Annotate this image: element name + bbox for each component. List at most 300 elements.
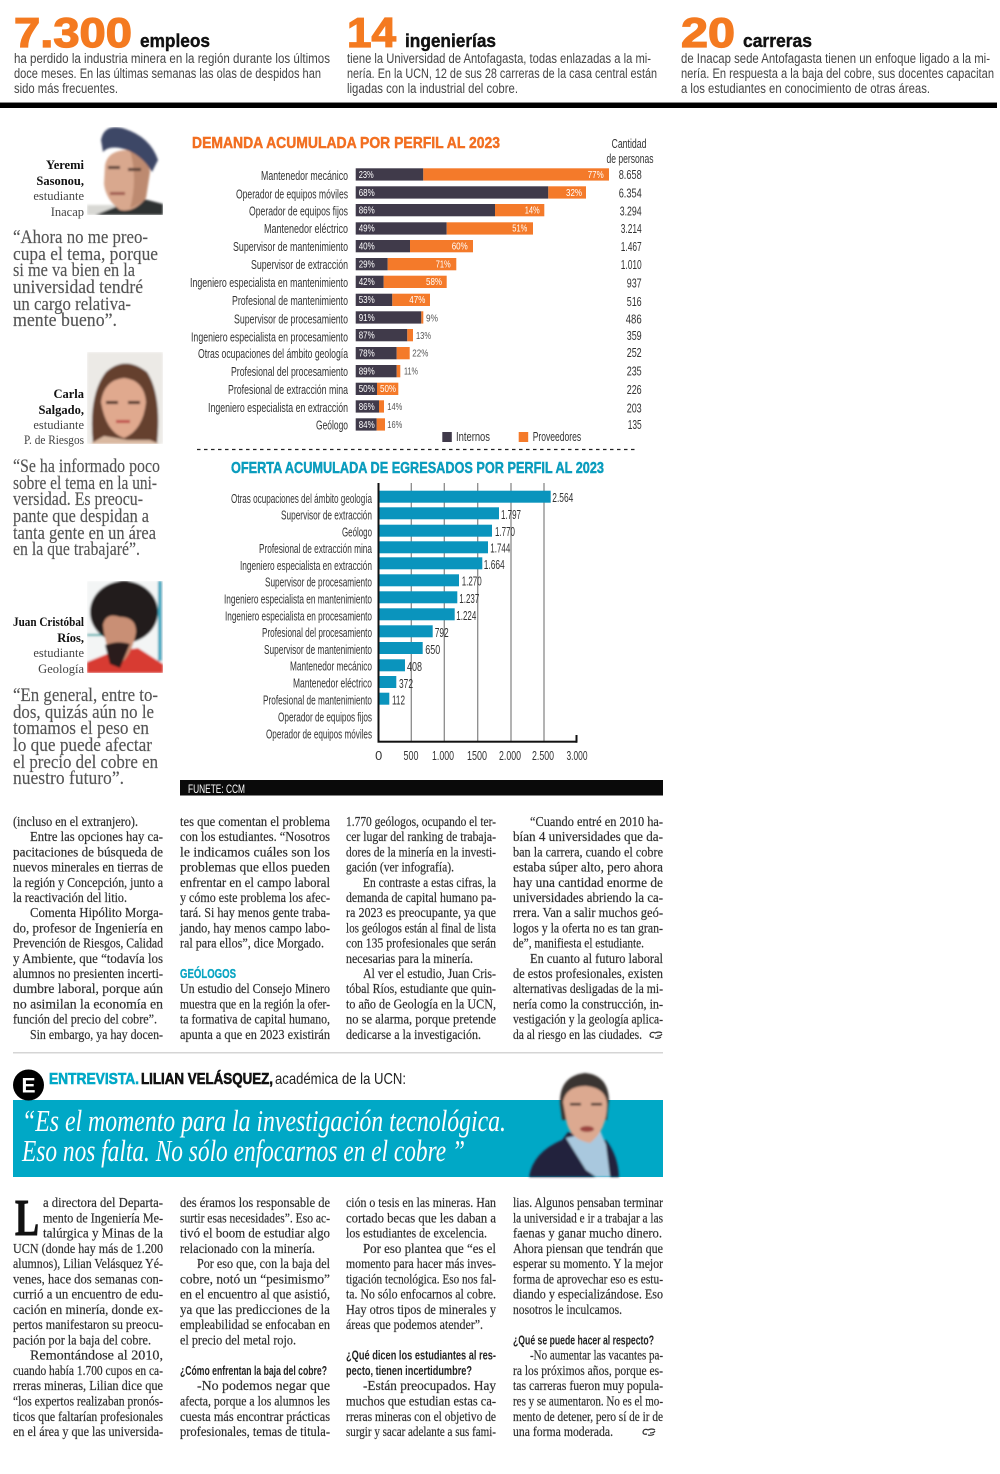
interview column 2: cobre, notó un “pesimismo”: [180, 1271, 330, 1286]
caption: Juan: Geología: [38, 662, 84, 676]
article column 4: [513, 814, 663, 1042]
interview heading: ENTREVISTA.: [49, 1071, 139, 1088]
row labels: Operador de equipos móviles: [266, 726, 372, 742]
quote: Yeremi: “Ahora no me preo-: [13, 227, 148, 248]
profile: Carla Salgado: [13, 352, 163, 560]
article column 2: con los estudiantes. “Nosotros: [180, 829, 330, 844]
legend: Internos: [456, 429, 490, 444]
interview column 4: res y se aumentaron. No es el mo-: [513, 1394, 663, 1408]
quote: Juan: dos, quizás aún no le: [13, 702, 154, 723]
axis tick labels: 500: [404, 748, 418, 763]
interview heading: académica de la UCN:: [275, 1071, 406, 1088]
article column 2: enfrentar en el campo laboral: [180, 875, 330, 890]
percentage labels: 13%: [416, 330, 431, 342]
row labels: Profesional del procesamiento: [231, 364, 348, 379]
article column 1: Sin embargo, ya hay docen-: [30, 1027, 163, 1042]
row labels: Ingeniero especialista en extracción: [240, 558, 372, 573]
article column 1: función del precio del cobre”.: [13, 1012, 157, 1027]
interview column 4: -No aumentar las vacantes pa-: [530, 1348, 663, 1363]
article column 1: Entre las opciones hay ca-: [30, 829, 163, 844]
article column 4: En cuanto al futuro laboral: [530, 951, 663, 966]
row labels: Operador de equipos fijos: [278, 710, 372, 724]
stat: 14 ingenierías: tiene la Universidad de Antofagasta, todas enlazadas a la mi-: [347, 51, 651, 66]
article column 1: pacitaciones de búsqueda de: [13, 844, 163, 859]
value labels: 1.664: [484, 557, 505, 572]
article column 1: y Ambiente, que “todavía los: [13, 951, 163, 966]
source bar: FUNETE: CCM: [188, 784, 245, 796]
interview column 1: “los expertos realizaban pronós-: [13, 1394, 163, 1408]
caption: Juan: estudiante: [33, 646, 84, 660]
percentage labels: 87%: [359, 330, 375, 342]
article column 2: muestra que en la región la ofer-: [180, 996, 330, 1011]
totals column: [619, 167, 642, 432]
article column 3: ra 2023 es preocupante, ya que: [346, 905, 496, 920]
article column 4: bían 4 universidades que da-: [513, 829, 663, 844]
icon: end mark: [643, 1429, 655, 1435]
percentage labels: 77%: [588, 169, 604, 181]
interview column 3: Por eso plantea que “es el: [363, 1241, 496, 1256]
interview column 2: profesionales, temas de titula-: [180, 1424, 330, 1439]
interview column 2: cuesta más encontrar prácticas: [180, 1409, 330, 1424]
interview column 1: en el área y que las universida-: [13, 1424, 163, 1439]
interview column 4: esperar su momento. Y la mejor: [513, 1256, 663, 1271]
row labels: Ingeniero especialista en mantenimiento: [224, 592, 372, 606]
interview column 2: tivó el boom de estudiar algo: [180, 1226, 330, 1240]
article column 2: apunta a que en 2023 existirán: [180, 1027, 330, 1042]
interview pull quote: Eso nos falta. No sólo enfocarnos en el cobre ”: [21, 1133, 465, 1168]
profile: Juan Cristóbal Ríos: [13, 581, 163, 789]
article column 1: la región y Concepción, junto a: [13, 875, 163, 890]
interview column 3: ción o tesis en las mineras. Han: [346, 1195, 496, 1210]
totals column: 1.010: [621, 257, 642, 272]
article column 3: dedicarse a la investigación.: [346, 1027, 481, 1042]
chart: demanda acumulada por perfil: [190, 135, 654, 444]
article column 1: Comenta Hipólito Morga-: [30, 905, 163, 920]
stat: 14 ingenierías: ligadas con la industrial del cobre.: [347, 81, 518, 96]
stacked bars: [356, 168, 609, 431]
stat: 7.300 empleos: ha perdido la industria minera en la región durante los últimos: [14, 51, 330, 66]
caption: Yeremi: estudiante: [33, 189, 84, 203]
stat: 20 carreras: carreras: [743, 31, 812, 51]
quote: Yeremi: mente bueno”.: [13, 310, 117, 331]
quote: Yeremi: [13, 227, 158, 331]
chart title: demanda: DEMANDA ACUMULADA POR PERFIL AL 2023: [192, 135, 500, 152]
article column 2: Un estudio del Consejo Minero: [180, 981, 330, 996]
quote: Carla: tanta gente en un área: [13, 523, 156, 544]
interview column 4: faenas y ganar mucho dinero.: [513, 1226, 662, 1240]
article column 1: [13, 814, 163, 1042]
stat: 14 ingenierías: 14: [347, 9, 397, 56]
quote: Juan: “En general, entre to-: [13, 685, 158, 706]
article column 4: da al riesgo en las ciudades.: [513, 1027, 642, 1042]
interview column 1: currió a un encuentro de edu-: [13, 1287, 163, 1302]
interview question 3: ¿Qué se puede hacer al respecto?: [513, 1332, 654, 1347]
interview column 4: Ahora piensan que tendrán que: [513, 1241, 663, 1256]
interview column 4: una forma moderada.: [513, 1424, 613, 1439]
quote: Yeremi: cupa el tema, porque: [13, 244, 158, 265]
interview column 4: mento de detener, pero sí de ir de: [513, 1409, 663, 1424]
interview column 4: tas carreras fueron muy popula-: [513, 1378, 663, 1393]
totals column: 3.214: [621, 221, 642, 236]
row labels: Supervisor de mantenimiento: [264, 642, 372, 657]
percentage labels: 23%: [359, 169, 374, 181]
totals column: 235: [627, 364, 642, 378]
legend: Proveedores: [533, 429, 581, 444]
quote: Carla: pante que despidan a: [13, 506, 149, 527]
interview teal band: [13, 1100, 663, 1177]
quote: Juan: nuestro futuro”.: [13, 768, 124, 789]
percentage labels: 84%: [359, 419, 375, 431]
article column 4: hay una cantidad enorme de: [513, 875, 663, 890]
interview column 2: afecta, porque a los alumnos les: [180, 1394, 330, 1408]
row labels: Operador de equipos móviles: [236, 186, 348, 202]
interview column 1: alumnos), Lilian Velásquez Yé-: [13, 1256, 163, 1272]
totals column: 1.467: [621, 239, 642, 254]
quote: Juan: el precio del cobre en: [13, 752, 158, 773]
chart: oferta acumulada de egresados: [224, 460, 604, 763]
axes: [378, 483, 578, 743]
percentage labels: 32%: [566, 187, 582, 199]
interview heading: LILIAN VELÁSQUEZ,: [141, 1069, 273, 1088]
quote: Carla: “Se ha informado poco: [13, 456, 160, 477]
row labels: Geólogo: [342, 524, 372, 540]
interview column 1: rreras mineras, Lilian dice que: [13, 1378, 163, 1393]
axis tick labels: [375, 748, 588, 763]
interview column 2: relacionado con la minería.: [180, 1241, 315, 1256]
row labels: Otras ocupaciones del ámbito geología: [231, 491, 373, 506]
percentage labels: 16%: [387, 419, 402, 431]
interview column 3: los estudiantes de excelencia.: [346, 1226, 487, 1240]
article column 1: no asimilan la economía en: [13, 996, 163, 1011]
interview column 1: a directora del Departa-: [43, 1195, 163, 1210]
article column 2: problemas que ellos pueden: [180, 860, 330, 875]
quote: Carla: versidad. Es preocu-: [13, 489, 143, 510]
row labels: [190, 168, 349, 432]
chart title: oferta: OFERTA ACUMULADA DE EGRESADOS POR PERFIL AL 2023: [231, 460, 604, 477]
percentage labels: 86%: [359, 204, 375, 216]
axis tick labels: 1.000: [432, 748, 454, 763]
row labels: Profesional del procesamiento: [262, 625, 372, 640]
article column 3: demanda de capital humano pa-: [346, 890, 496, 905]
article column 1: la reactivación del litio.: [13, 890, 127, 905]
article column 3: los geólogos están al final de lista: [346, 920, 496, 935]
totals column: 6.354: [619, 186, 642, 200]
article column 3: tóbal Ríos, estudiante que quin-: [346, 981, 496, 996]
percentage labels: 58%: [426, 276, 442, 288]
value labels: 112: [392, 692, 405, 708]
percentage labels: 29%: [359, 258, 375, 270]
article column 4: de”, manifiesta el estudiante.: [513, 936, 644, 951]
article column 4: alternativas desligadas de la mi-: [513, 981, 663, 996]
interview column 1: cuando había 1.700 cupos en ca-: [13, 1363, 163, 1378]
article column 3: to año de Geología en la UCN,: [346, 996, 496, 1011]
percentage labels: 42%: [359, 276, 375, 288]
caption: Juan: [13, 615, 84, 676]
value labels: 1.770: [495, 524, 515, 539]
interview column 3: tigación tecnológica. Eso nos fal-: [346, 1271, 496, 1286]
article column 4: nería como la construcción, in-: [513, 996, 663, 1011]
interview column 1: UCN (donde hay más de 1.200: [13, 1241, 163, 1257]
percentage labels: 50%: [380, 383, 396, 395]
article column 2: [179, 814, 330, 1042]
percentage labels: 91%: [359, 312, 375, 324]
row labels: Ingeniero especialista en extracción: [208, 400, 348, 415]
row labels: Profesional de mantenimiento: [263, 692, 372, 708]
row labels: Geólogo: [316, 418, 348, 432]
row labels: [224, 491, 373, 742]
article column 3: [346, 814, 496, 1042]
article column 3: gación (ver infografía).: [346, 860, 454, 876]
value labels: 1.224: [456, 608, 476, 623]
totals column: 486: [626, 312, 642, 326]
interview column 3: ta. No sólo enfocarnos al cobre.: [346, 1287, 496, 1302]
row labels: Profesional de extracción mina: [228, 382, 349, 397]
interview question 2: ¿Qué dicen los estudiantes al res-: [346, 1348, 496, 1363]
article column 2: jando, hay menos campo labo-: [179, 920, 330, 935]
interview column 4: forma de aprovechar eso es estu-: [513, 1271, 663, 1286]
interview question 1: ¿Cómo enfrentan la baja del cobre?: [180, 1363, 327, 1378]
caption: Carla: Carla: [53, 387, 85, 401]
interview column 3: surgir y sacar adelante a sus fami-: [346, 1424, 496, 1439]
row labels: Mantenedor mecánico: [290, 658, 372, 674]
article column 1: Prevención de Riesgos, Calidad: [13, 936, 163, 951]
article column 2: ral para ellos”, dice Morgado.: [180, 936, 324, 951]
percentage labels: 14%: [525, 204, 540, 216]
interview column 4: [513, 1195, 663, 1439]
interview column 2: Por eso que, con la baja del: [197, 1256, 330, 1271]
caption: Yeremi: Sasonou,: [36, 174, 84, 188]
interview column 1: mento de Ingeniería Me-: [43, 1210, 163, 1225]
quote: Yeremi: un cargo relativa-: [13, 294, 131, 315]
percentage labels: 50%: [359, 383, 375, 395]
interview column 1: Remontándose al 2010,: [30, 1348, 163, 1363]
interview column 1: venes, hace dos semanas con-: [13, 1271, 163, 1286]
column header: cantidad de personas: [606, 136, 654, 166]
stat: 20 carreras: a los estudiantes en conocimiento de otras áreas.: [681, 81, 930, 96]
axis tick labels: 2.000: [499, 748, 521, 763]
row labels: Otras ocupaciones del ámbito geología: [198, 346, 349, 361]
stat: 7.300 empleos: empleos: [140, 31, 210, 51]
article column 1: alumnos no presienten incerti-: [13, 966, 163, 981]
article column 2: y cómo este problema los afec-: [180, 890, 330, 905]
row labels: Operador de equipos fijos: [249, 204, 348, 218]
percentage labels: 68%: [359, 187, 375, 199]
interview pull quote: [21, 1103, 506, 1168]
article column 3: necesarias para la minería.: [346, 951, 473, 966]
interview column 3: áreas que podemos atender”.: [346, 1317, 483, 1332]
quote: Yeremi: si me va bien en la: [13, 260, 135, 281]
percentage labels: 22%: [412, 348, 428, 360]
totals column: 252: [627, 345, 642, 360]
article column 4: “Cuando entré en 2010 ha-: [530, 814, 663, 829]
caption: Yeremi: Inacap: [51, 205, 84, 219]
axis tick labels: 2.500: [532, 748, 554, 763]
article column 1: do, profesor de Ingeniería en: [13, 920, 163, 935]
interview column 4: ra los próximos años, porque es-: [513, 1363, 663, 1378]
article column 4: vestigación y la geología aplica-: [513, 1012, 663, 1027]
stat: 14 ingenierías: nería. En la UCN, 12 de sus 28 carreras de la casa central están: [347, 66, 657, 81]
interview column 2: des éramos los responsable de: [180, 1195, 330, 1210]
article column 3: 1.770 geólogos, ocupando el ter-: [346, 814, 496, 829]
article column 4: rrera. Van a salir muchos geó-: [513, 905, 663, 920]
source bar: [180, 780, 663, 796]
quote: Carla: sobre el tema en la uni-: [13, 473, 157, 494]
grid lines: [411, 483, 544, 741]
row labels: Mantenedor eléctrico: [264, 221, 348, 236]
article column 2: le indicamos cuáles son los: [180, 844, 330, 859]
row labels: Mantenedor mecánico: [261, 168, 348, 183]
interview column 1: talúrgica y Minas de la: [43, 1226, 163, 1240]
interview heading: [49, 1069, 406, 1088]
totals column: 937: [627, 276, 642, 290]
interview column 1: pertos manifestaron su preocu-: [13, 1317, 163, 1332]
photo: Carla: [87, 352, 163, 444]
totals column: 135: [628, 417, 642, 432]
article column 4: logos y la oferta no es tan gran-: [513, 920, 663, 935]
article column 1: (incluso en el extranjero).: [13, 814, 138, 830]
interview column 2: en el encuentro al que asistió,: [180, 1287, 330, 1302]
interview column 2: el precio del metal rojo.: [180, 1332, 296, 1347]
article column 4: ban la carrera, cuando el cobre: [513, 844, 663, 859]
row labels: Profesional de extracción mina: [259, 541, 373, 556]
value labels: 1.270: [462, 574, 482, 588]
totals column: 516: [627, 294, 642, 309]
article column 2: ta formativa de capital humano,: [180, 1012, 330, 1027]
value labels: 1.237: [459, 591, 479, 606]
article column 2: tará. Si hay menos gente traba-: [180, 905, 330, 920]
percentage labels: 9%: [426, 312, 438, 324]
value labels: 408: [407, 659, 422, 674]
caption: Yeremi: [33, 158, 85, 219]
article column 3: En contraste a estas cifras, la: [363, 875, 496, 890]
interview column 3: rreras mineras con el objetivo de: [346, 1409, 496, 1424]
percentage labels: 53%: [359, 294, 375, 306]
totals column: 203: [627, 400, 642, 416]
interview column 2: ya que las predicciones de la: [180, 1302, 330, 1317]
totals column: 3.294: [620, 204, 642, 218]
value labels: 650: [425, 642, 440, 657]
article column 2: tes que comentan el problema: [180, 814, 330, 829]
quote: Juan: [13, 685, 158, 789]
axis tick labels: 1500: [467, 748, 487, 763]
stat: 7.300 empleos: sido más frecuentes.: [14, 81, 118, 96]
bars: [379, 491, 551, 705]
row labels: Supervisor de extracción: [281, 508, 372, 522]
quote: Carla: [13, 456, 160, 560]
interview column 3: cortado becas que les daban a: [346, 1210, 496, 1225]
stat: 14 ingenierías: ingenierías: [405, 31, 496, 51]
interview column 3: Hay otros tipos de minerales y: [346, 1302, 496, 1317]
legend: [442, 429, 581, 444]
quote: Carla: en la que trabajaré”.: [13, 539, 140, 560]
column header: cantidad de personas: Cantidad: [612, 136, 646, 151]
interview column 3: muchos que estudian estas ca-: [346, 1394, 496, 1408]
percentage labels: 60%: [452, 240, 468, 252]
interview column 2: -No podemos negar que: [197, 1378, 330, 1393]
percentage labels: 89%: [359, 366, 375, 378]
article column 3: dores de la minería en la investi-: [346, 844, 496, 859]
stat: 20 carreras: 20: [681, 9, 735, 56]
interview column 1: cación en minería, donde ex-: [13, 1302, 163, 1317]
caption: Carla: Salgado,: [38, 403, 84, 417]
value labels: 1.797: [501, 507, 521, 522]
row labels: Mantenedor eléctrico: [293, 676, 372, 690]
percentage labels: 51%: [512, 222, 527, 234]
interview column 2: empleabilidad se enfocaban en: [180, 1317, 330, 1332]
interview column 1: pación por la baja del cobre.: [13, 1332, 151, 1347]
interview column 4: lias. Algunos pensaban terminar: [513, 1195, 663, 1210]
profile: Yeremi Sasonou: [13, 127, 163, 331]
row labels: Supervisor de extracción: [251, 257, 348, 272]
value labels: 372: [399, 676, 413, 691]
percentage labels: 78%: [359, 348, 375, 360]
photo: Juan: [87, 581, 163, 673]
interview column 3: momento para hacer más inves-: [346, 1256, 496, 1271]
row labels: Supervisor de mantenimiento: [233, 239, 348, 254]
article column 3: Al ver el estudio, Juan Cris-: [363, 966, 496, 981]
row labels: Supervisor de procesamiento: [265, 574, 372, 590]
row labels: Profesional de mantenimiento: [232, 293, 348, 308]
caption: Juan: Ríos,: [57, 631, 84, 645]
interview column 4: nosotros le inculcamos.: [513, 1302, 622, 1317]
totals column: 226: [627, 382, 642, 397]
caption: Yeremi: Yeremi: [46, 158, 85, 172]
stat: 7.300 empleos: 7.300: [14, 9, 132, 56]
caption: Carla: estudiante: [33, 418, 84, 432]
row labels: Ingeniero especialista en procesamiento: [191, 330, 348, 344]
article column 3: no se alarma, porque pretende: [346, 1012, 496, 1027]
photo: Lilian Velásquez: [529, 1073, 619, 1177]
column header: cantidad de personas: de personas: [606, 151, 654, 166]
interview column 4: la universidad e ir a trabajar a las: [513, 1210, 663, 1225]
interview column 2: surtir esas necesidades”. Eso ac-: [180, 1210, 330, 1225]
interview column 3: [346, 1195, 496, 1439]
interview badge: E: [13, 1070, 44, 1100]
percentage labels: [359, 169, 604, 431]
article column 1: dumbre laboral, porque aún: [13, 981, 163, 996]
stat: 20 carreras: [681, 9, 994, 96]
totals column: 8.658: [619, 167, 642, 182]
interview column 2: [180, 1195, 330, 1439]
percentage labels: 40%: [359, 240, 375, 252]
drop cap: L: [15, 1190, 39, 1247]
photo: Yeremi: [87, 127, 163, 215]
caption: Carla: [24, 387, 85, 447]
percentage labels: 47%: [409, 294, 425, 306]
percentage labels: 86%: [359, 401, 375, 413]
caption: Carla: P. de Riesgos: [24, 433, 84, 447]
row labels: Ingeniero especialista en procesamiento: [225, 608, 372, 624]
article column 4: de estos profesionales, existen: [513, 966, 663, 981]
article column 1: nuevos minerales en tierras de: [13, 860, 163, 875]
quote: Juan: tomamos el peso en: [13, 718, 149, 739]
percentage labels: 71%: [436, 258, 451, 270]
subhead: geólogos: GEÓLOGOS: [180, 966, 236, 981]
icon: end mark: [650, 1032, 662, 1038]
percentage labels: 49%: [359, 222, 375, 234]
value labels: [392, 490, 573, 708]
article column 4: universidades abriendo la ca-: [513, 890, 663, 905]
article column 3: con 135 profesionales que serán: [346, 936, 496, 951]
article column 4: estaba súper alto, pero ahora: [513, 860, 663, 875]
stat: 7.300 empleos: doce meses. En las últimas semanas las olas de despidos han: [14, 66, 321, 81]
stat: 7.300 empleos: [14, 9, 330, 96]
interview question 2: pecto, tienen incertidumbre?: [346, 1363, 472, 1378]
axis tick labels: 3.000: [566, 748, 588, 763]
interview pull quote: “Es el momento para la investigación tecnológica.: [22, 1103, 506, 1138]
stat: 14 ingenierías: [347, 9, 657, 96]
totals column: 359: [627, 328, 642, 343]
